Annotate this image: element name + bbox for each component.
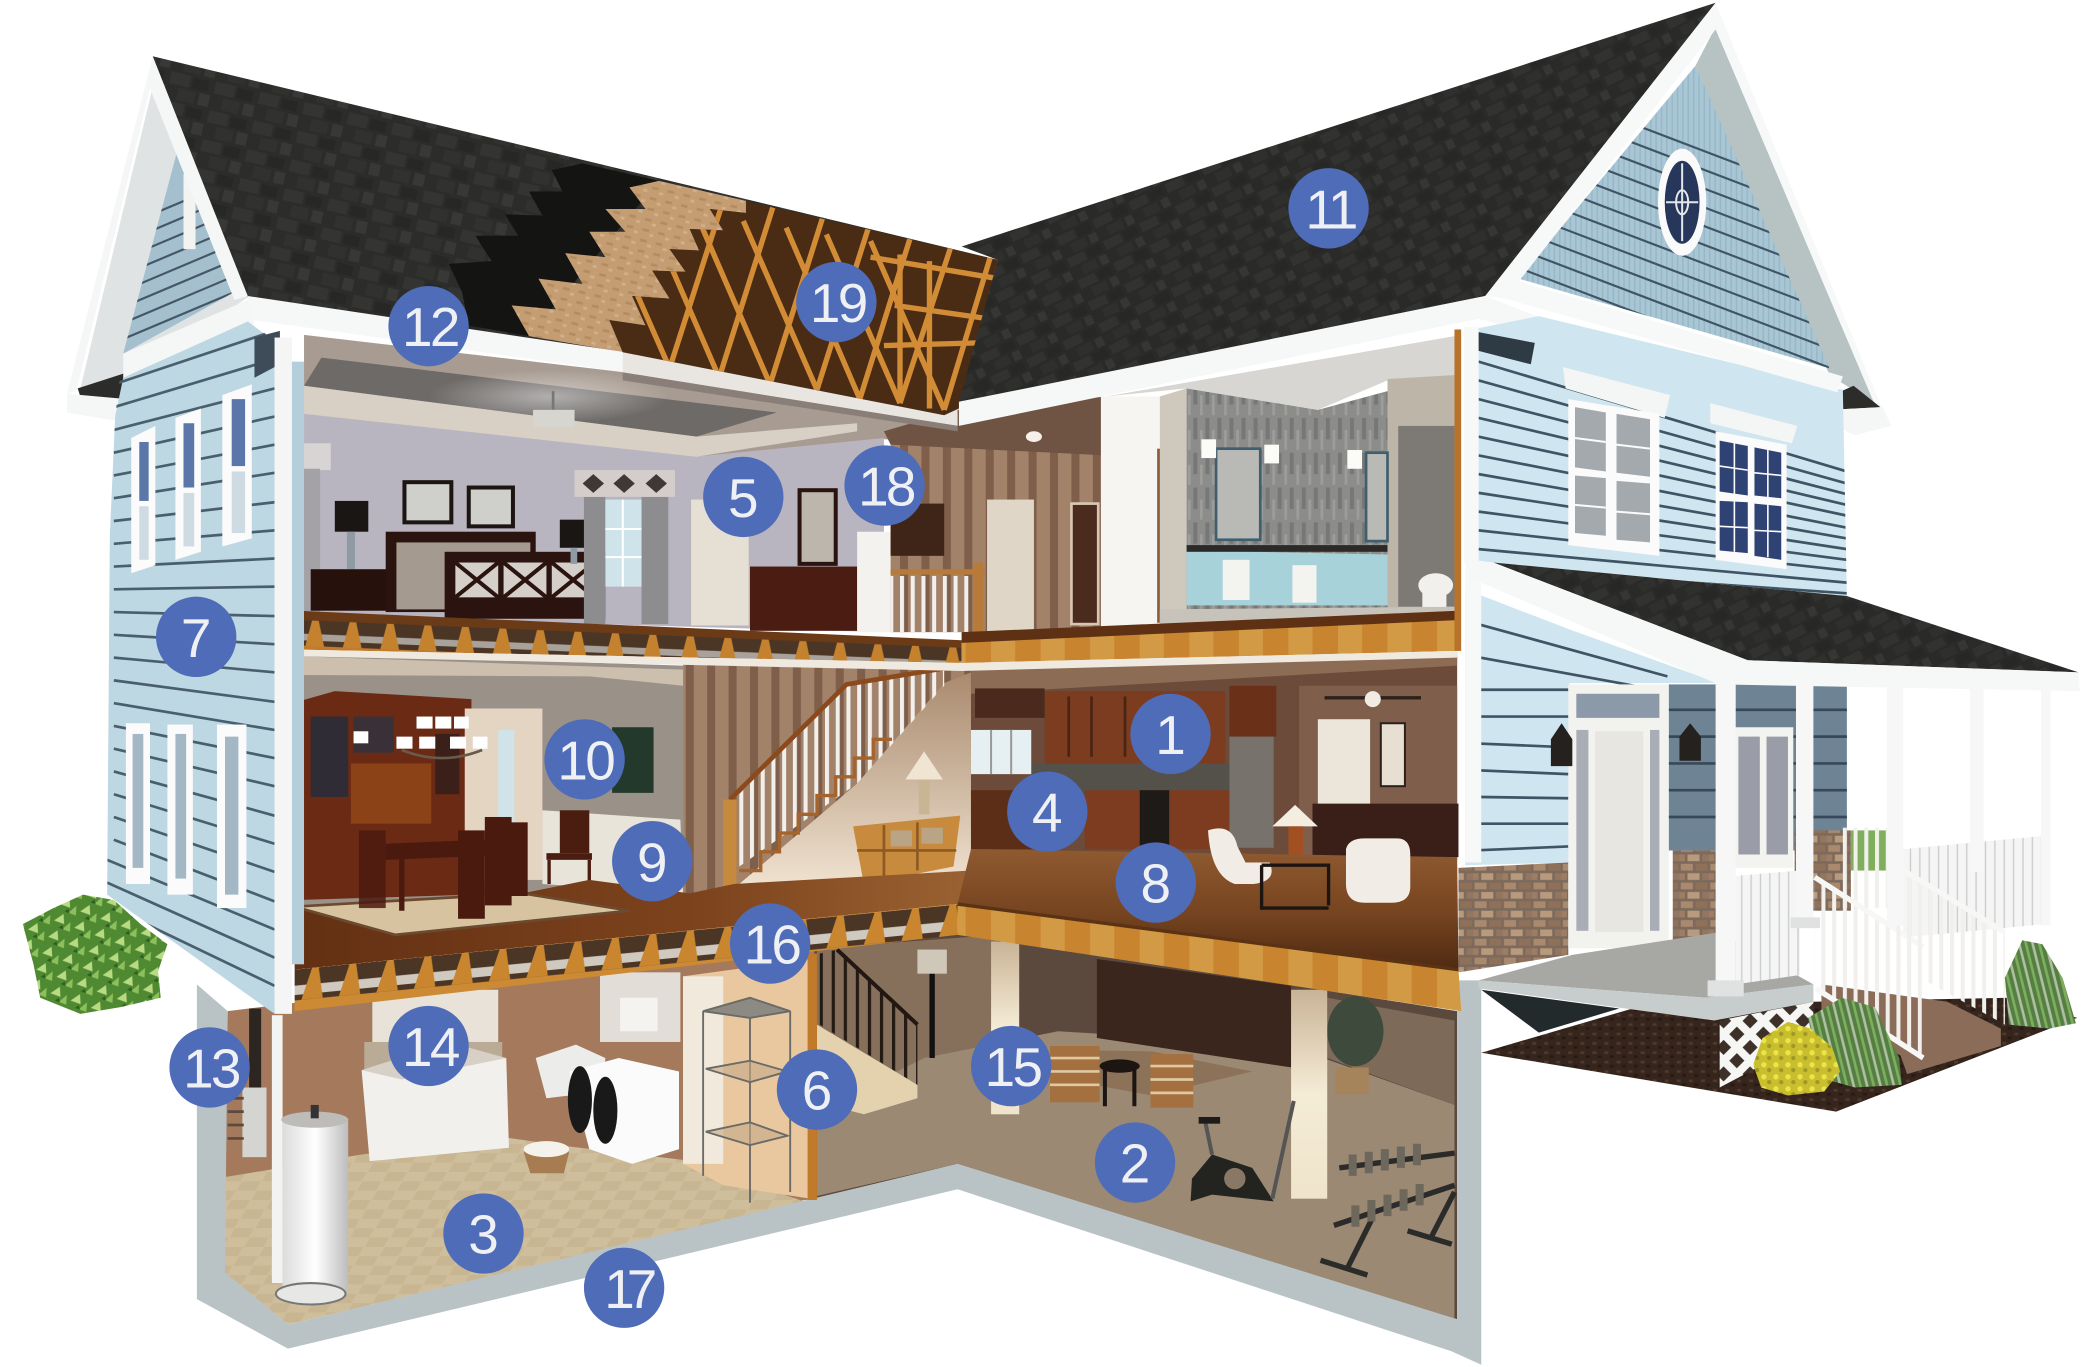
striped lounge chairs bbox=[1050, 1046, 1193, 1108]
panel: upstairs hall bbox=[884, 396, 1108, 632]
lavender wall bbox=[304, 414, 884, 632]
wall pictures bbox=[404, 482, 513, 526]
refrigerator bbox=[1229, 737, 1274, 848]
number badge 13: 13 bbox=[183, 1038, 240, 1100]
upper cabinets bbox=[975, 686, 1276, 767]
lower brick left bbox=[1458, 863, 1568, 972]
eave: main wing fascia bbox=[959, 296, 1540, 426]
stair railing back bbox=[1895, 865, 2005, 1025]
back wall left bbox=[817, 935, 998, 1112]
hall door bbox=[987, 500, 1034, 632]
door bbox=[1318, 719, 1370, 806]
number badge 17: 17 bbox=[604, 1258, 655, 1320]
support column left bbox=[991, 942, 1019, 1114]
side table bbox=[1100, 1059, 1140, 1106]
right trim bbox=[1716, 3, 1890, 427]
chandelier bbox=[354, 717, 488, 758]
far railing and greenery bbox=[1838, 828, 2045, 938]
under-deck shadow bbox=[1481, 990, 1619, 1033]
number badge 11 bbox=[1288, 168, 1369, 248]
number badge 9 bbox=[612, 821, 692, 901]
ceiling fan bbox=[1325, 691, 1421, 707]
wall art bbox=[612, 727, 654, 793]
china hutch bbox=[297, 691, 471, 900]
lamp bbox=[905, 751, 943, 814]
front railing panel bbox=[1736, 871, 1800, 984]
right wall lighter bbox=[1299, 686, 1457, 857]
ceiling soffit bbox=[304, 335, 1106, 457]
gable siding bbox=[1519, 66, 1829, 368]
ceiling light bbox=[533, 391, 575, 427]
porch window bbox=[1733, 727, 1793, 868]
panel: basement recreation room bbox=[814, 932, 1457, 1319]
panel: stair hall bbox=[683, 663, 971, 920]
wainscot bbox=[542, 810, 683, 893]
upper cabinets bbox=[372, 972, 680, 1042]
rug in dining room bbox=[295, 893, 629, 935]
shower bbox=[1398, 426, 1454, 607]
number badge 18 bbox=[844, 445, 925, 526]
return bbox=[67, 372, 127, 421]
gable soffit bbox=[1696, 27, 1880, 407]
crown moulding bbox=[304, 386, 857, 457]
number badge 3: 3 bbox=[468, 1204, 499, 1266]
hall ceiling bbox=[884, 396, 1106, 455]
number badge 4: 4 bbox=[1032, 782, 1063, 844]
water heater bbox=[272, 1015, 348, 1304]
peach partition wall bbox=[683, 959, 810, 1199]
lattice skirt bbox=[1720, 1002, 1813, 1088]
eave: left wing fascia bbox=[244, 296, 625, 372]
stair rail bbox=[730, 668, 944, 800]
number badge 17 bbox=[584, 1248, 664, 1328]
side siding strip bbox=[292, 362, 304, 964]
number badge 19 bbox=[796, 262, 877, 342]
number badge 12 bbox=[388, 286, 469, 366]
right wall bbox=[1388, 375, 1454, 613]
number badge 5: 5 bbox=[728, 467, 759, 529]
carpet bbox=[817, 1031, 1454, 1319]
upper windows bbox=[131, 384, 252, 573]
foundation bbox=[197, 980, 1481, 1365]
dark cabinets bbox=[1097, 959, 1291, 1067]
tray ceiling bbox=[304, 358, 777, 437]
gable trim bbox=[67, 56, 248, 394]
number badge 15: 15 bbox=[985, 1036, 1041, 1098]
stair treads bbox=[739, 739, 892, 871]
number badge 6: 6 bbox=[802, 1060, 832, 1122]
gable vent bbox=[183, 174, 196, 249]
number badge 9: 9 bbox=[637, 831, 668, 893]
wire shelving unit bbox=[703, 998, 790, 1203]
sofa bbox=[1312, 804, 1458, 857]
left gable bbox=[67, 56, 254, 421]
partition edge bbox=[808, 954, 817, 1200]
roof: left wing shingles bbox=[153, 56, 998, 402]
rug bbox=[1058, 1050, 1252, 1096]
number badge 7: 7 bbox=[181, 607, 211, 669]
basement stair bbox=[817, 950, 917, 1114]
bed bbox=[386, 532, 605, 619]
utility sink bbox=[536, 1045, 605, 1098]
number badge 13 bbox=[169, 1027, 250, 1108]
exposed roof trusses bbox=[610, 201, 998, 416]
side doorway bbox=[1071, 504, 1098, 624]
white partition bbox=[1101, 396, 1160, 627]
backsplash and base cabinets bbox=[362, 1042, 509, 1161]
floor edge line bbox=[958, 904, 1458, 970]
window left bbox=[1563, 367, 1670, 556]
corner stud and trim bbox=[1454, 327, 1479, 651]
kitchen window bbox=[971, 730, 1031, 774]
shrub bbox=[23, 895, 167, 1014]
corner trim bbox=[1465, 563, 1481, 863]
wall lanterns bbox=[1551, 723, 1701, 766]
number badge 18: 18 bbox=[858, 456, 915, 518]
floor joists: main level left bbox=[295, 904, 958, 1011]
number badge 8 bbox=[1116, 842, 1196, 923]
number badge 2 bbox=[1095, 1122, 1175, 1203]
ceiling strip bbox=[297, 656, 683, 686]
corner trim bbox=[275, 338, 292, 1014]
number badge 16: 16 bbox=[744, 914, 800, 976]
right wing gable bbox=[1485, 3, 1891, 435]
floor joists: upper level left bbox=[299, 611, 962, 663]
floor band: upper level right bbox=[962, 615, 1457, 663]
roof: sheathing bbox=[512, 181, 746, 352]
table lamp left bbox=[335, 501, 368, 569]
grass plant right bbox=[2005, 940, 2076, 1029]
number badge 6 bbox=[777, 1049, 857, 1130]
number badge 3 bbox=[443, 1193, 524, 1274]
stair railing front bbox=[1815, 877, 1923, 1058]
grass plant centre bbox=[1808, 998, 1902, 1088]
number badge 1 bbox=[1130, 694, 1211, 774]
porch roof fascia bbox=[1472, 560, 2080, 691]
panel: kitchen and living room bbox=[971, 652, 1458, 861]
bathroom floor bbox=[1160, 607, 1454, 627]
window right bbox=[1710, 403, 1797, 569]
hall picture bbox=[891, 504, 944, 556]
curtain left bbox=[304, 469, 320, 616]
deck bbox=[1479, 932, 1813, 998]
laundry tile floor bbox=[224, 1137, 804, 1325]
panel: basement laundry room bbox=[224, 938, 817, 1325]
number badge 12: 12 bbox=[402, 296, 458, 358]
floor: main level right bbox=[958, 849, 1458, 970]
right wall siding bbox=[1454, 281, 1847, 651]
ceiling bbox=[971, 652, 1457, 694]
frieze bbox=[1505, 281, 1843, 392]
round window bbox=[1658, 149, 1706, 256]
right wall bbox=[1327, 998, 1454, 1105]
white ceiling strip bbox=[299, 650, 1457, 671]
shaded wall bbox=[1669, 684, 1847, 850]
porch wall siding bbox=[1465, 589, 1718, 865]
washer and dryer bbox=[568, 1058, 679, 1164]
number badge 7 bbox=[156, 597, 236, 677]
number badge 10: 10 bbox=[557, 729, 614, 791]
brick steps bbox=[1821, 984, 2001, 1074]
lower cabinets bbox=[971, 790, 1229, 849]
white column bbox=[857, 532, 892, 632]
table lamp right bbox=[560, 520, 588, 564]
column bases bbox=[1708, 917, 1820, 996]
dark eave bracket bbox=[254, 331, 280, 378]
panel: dining room bbox=[297, 654, 683, 907]
frieze bbox=[123, 300, 254, 383]
dining table and chairs bbox=[359, 817, 528, 919]
dumbbell rack bbox=[1321, 1144, 1454, 1275]
gable siding bbox=[123, 153, 234, 354]
left wall siding bbox=[107, 321, 304, 1015]
dresser bbox=[750, 567, 857, 631]
floor edge: main level right bbox=[958, 904, 1461, 1011]
front door bbox=[1568, 684, 1669, 948]
number badge 4 bbox=[1007, 771, 1088, 852]
eave: soffit shadow bbox=[623, 372, 958, 431]
curtains and window bbox=[465, 709, 542, 880]
panel: front porch bbox=[1458, 560, 2080, 1112]
yellow shrub bbox=[1753, 1022, 1840, 1096]
deck edge bbox=[1479, 980, 1813, 1021]
vanity bbox=[1187, 545, 1388, 605]
toilet bbox=[1418, 573, 1453, 609]
backsplash bbox=[1031, 763, 1229, 796]
porch columns bbox=[1716, 684, 2050, 990]
ceiling glow bbox=[429, 370, 670, 423]
roof: underlayment bbox=[449, 163, 659, 336]
bedroom door bbox=[691, 500, 749, 625]
wall chair bbox=[546, 810, 592, 884]
white lounge chairs bbox=[1208, 828, 1410, 903]
eave: exposed rafter tails bbox=[623, 352, 958, 426]
mirrors and sconces bbox=[1201, 439, 1388, 541]
ceiling spotlight bbox=[1026, 431, 1042, 442]
panel: upstairs bedroom bbox=[304, 335, 1106, 632]
lower windows bbox=[126, 723, 246, 908]
number badge 10 bbox=[544, 719, 625, 800]
exercise bike bbox=[1191, 1101, 1294, 1201]
stair balusters bbox=[734, 667, 944, 867]
number badge 11: 11 bbox=[1305, 178, 1356, 240]
bathroom ceiling bbox=[1106, 336, 1454, 410]
floor: main level left bbox=[295, 871, 971, 970]
number badge 14 bbox=[388, 1006, 469, 1086]
floor edge: upper level right bbox=[962, 611, 1457, 643]
hall railing bbox=[891, 563, 984, 632]
newel post bbox=[723, 800, 737, 920]
support column right bbox=[1291, 990, 1327, 1199]
number badge 8: 8 bbox=[1141, 853, 1171, 915]
panel: bathroom bbox=[1101, 336, 1454, 627]
number badge 16 bbox=[730, 903, 810, 984]
number badge 19: 19 bbox=[810, 272, 866, 334]
cream wall bbox=[739, 672, 971, 887]
console cabinet bbox=[853, 816, 960, 884]
porch roof bbox=[1493, 563, 2079, 672]
door behind shelving bbox=[683, 976, 723, 1164]
ground mulch bbox=[1481, 998, 2077, 1112]
beige wall bbox=[1160, 388, 1187, 624]
eave bracket bbox=[1479, 332, 1535, 364]
valance left bbox=[304, 443, 331, 470]
number badge 5 bbox=[703, 457, 783, 537]
number badge 1: 1 bbox=[1155, 704, 1186, 766]
gable soffit bbox=[80, 87, 248, 388]
door frame bbox=[1157, 449, 1171, 623]
bedroom window bbox=[575, 470, 675, 624]
nightstand bbox=[311, 569, 388, 611]
picture bbox=[1381, 723, 1405, 786]
left fascia bbox=[1485, 3, 1716, 299]
patterned wall bbox=[1187, 388, 1388, 609]
electrical panel and conduit bbox=[228, 1009, 267, 1157]
floor lamp shade bbox=[1272, 805, 1318, 861]
potted plant bbox=[1327, 996, 1383, 1094]
lower brick right bbox=[1673, 850, 1733, 942]
number badge 15 bbox=[971, 1026, 1051, 1106]
roof: main wing shingles bbox=[959, 3, 1716, 402]
floor lamp bbox=[917, 950, 947, 1058]
mirror bbox=[800, 490, 836, 564]
return bbox=[1829, 386, 1891, 435]
number badge 14: 14 bbox=[402, 1016, 459, 1078]
laundry basket bbox=[524, 1141, 569, 1173]
number badge 2: 2 bbox=[1120, 1133, 1150, 1195]
coffee table bbox=[1262, 865, 1329, 908]
